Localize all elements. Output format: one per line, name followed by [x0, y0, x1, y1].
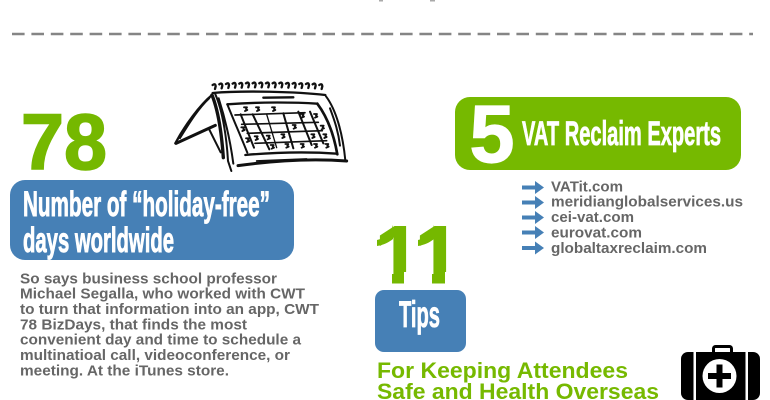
text block: tips subtitle	[377, 358, 659, 400]
tips label: Tips	[399, 294, 440, 335]
text block: app description: multinatioal call, videoconference, or	[20, 347, 290, 364]
panel: holiday-free heading	[10, 180, 294, 260]
big number 11: 1	[415, 210, 461, 301]
text block: app description: Michael Segalla, who worked with CWT	[20, 286, 305, 302]
list: VAT reclaim websites	[522, 179, 743, 257]
big number 5: 5	[470, 89, 514, 180]
front pages curl	[212, 95, 223, 158]
heading text: Number of “holiday-free”	[23, 185, 270, 224]
calendar day marks	[241, 107, 329, 149]
text block: tips subtitle: For Keeping Attendees	[377, 358, 628, 383]
back stand	[175, 95, 212, 143]
calendar coils	[213, 83, 322, 89]
big number 78: 78	[21, 97, 107, 186]
text block: app description: So says business school professor	[20, 270, 277, 287]
text block: app description	[20, 270, 319, 380]
calendar grid	[235, 113, 327, 143]
website names: cei-vat.com	[551, 209, 634, 226]
big number 11	[368, 210, 461, 301]
text block: app description: convenient day and time to schedule a	[20, 332, 302, 349]
heading text	[23, 185, 270, 260]
panel: VAT reclaim experts banner	[455, 89, 741, 180]
big number 11: 1	[375, 210, 421, 301]
icon: hand-drawn calendar	[175, 83, 347, 171]
website names	[551, 179, 743, 257]
calendar binding and top sheet outline	[213, 92, 325, 95]
website names: globaltaxreclaim.com	[551, 240, 707, 257]
arrows	[522, 181, 544, 254]
text block: app description: 78 BizDays, that finds the most	[20, 316, 247, 333]
heading text: days worldwide	[23, 221, 174, 260]
bottom lines	[245, 152, 337, 155]
icon: first aid kit	[681, 346, 760, 400]
website names: eurovat.com	[551, 224, 642, 241]
website names: VATit.com	[551, 179, 623, 196]
panel: Tips box	[375, 290, 466, 352]
cropped text remnant at top edge	[379, 0, 435, 2]
text block: app description: meeting. At the iTunes store.	[20, 362, 229, 380]
website names: meridianglobalservices.us	[551, 194, 743, 211]
text block: app description: to turn that information into an app, CWT	[20, 301, 319, 318]
